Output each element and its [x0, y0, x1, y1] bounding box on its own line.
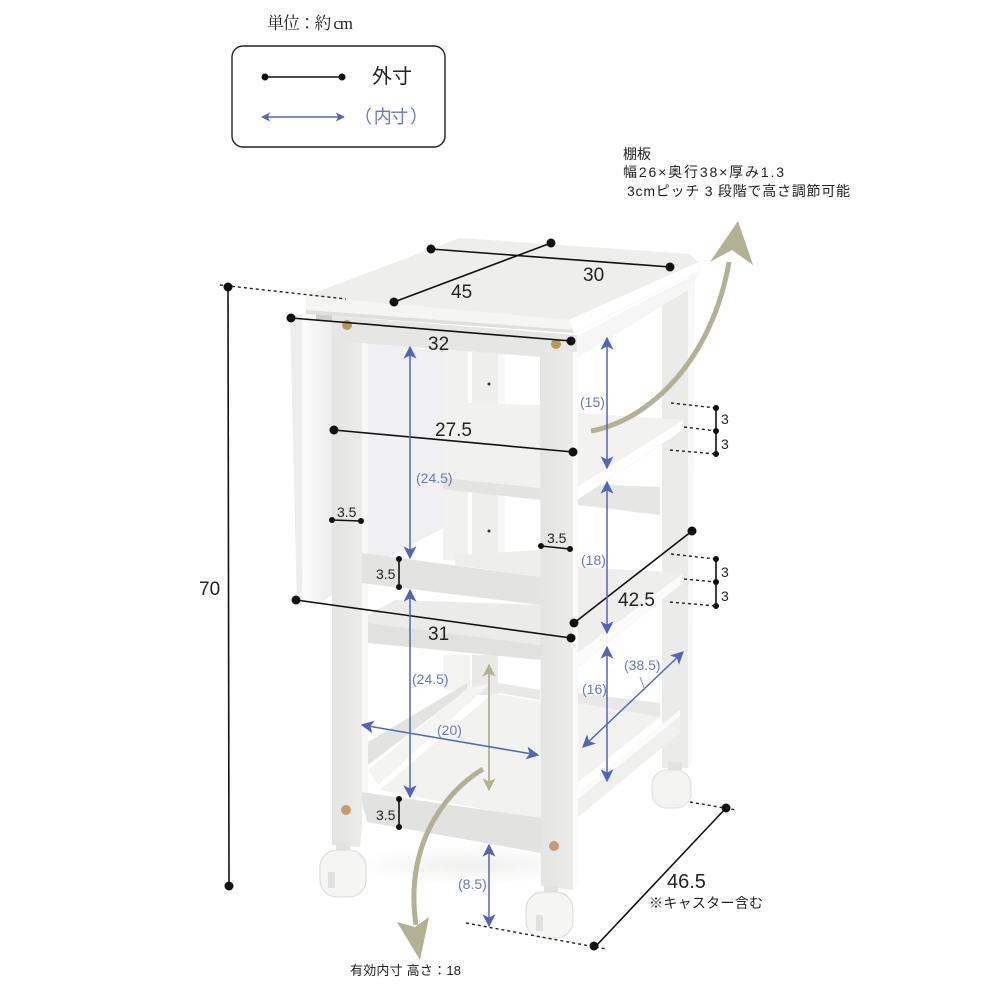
pitch dimensions upper 3 3: 3: [721, 436, 729, 452]
small dimensions 3.5: [329, 504, 573, 830]
shelf note: [623, 146, 850, 199]
front top rail: [332, 316, 577, 358]
dimension: 32: 32: [428, 334, 449, 355]
pitch dimensions upper 3 3: [670, 403, 729, 457]
legend: outer dimension: 外寸: [372, 65, 412, 88]
dimension: 32: [286, 314, 576, 355]
arrow: upper shelf lift: [591, 221, 753, 431]
unit label: 単位：約 cm: [267, 14, 353, 33]
inner dimension: 15: [580, 338, 607, 468]
small dimensions 3.5: 3.5: [337, 504, 357, 520]
inner dimension: 8.5: (8.5): [458, 876, 487, 892]
upper shelf: [368, 403, 683, 500]
inner dimension: 16: [582, 647, 607, 781]
shelf note: 幅26×奥行38×厚み1.3: [623, 164, 784, 180]
effective height note: 有効内寸 高さ：18: [350, 963, 461, 978]
floor shadows: [350, 845, 590, 885]
dimension: 70 total height: 70: [199, 579, 220, 600]
dimension: 42.5: 42.5: [618, 590, 655, 611]
dimension: 42.5: [570, 526, 696, 628]
wagon photo illustration: [290, 238, 700, 938]
inner dimension: 38.5: (38.5): [624, 657, 661, 673]
legend box: [232, 46, 445, 147]
back shelf rails: [578, 484, 660, 515]
legend: outer dimension: [262, 65, 412, 88]
dimension: 31: 31: [428, 624, 449, 645]
small dimensions 3.5: 3.5: [376, 566, 396, 582]
dimension: 46.5 caster: ※キャスター含む: [649, 895, 763, 911]
brass screws: [341, 320, 561, 851]
leg highlight strip: [362, 340, 368, 810]
casters: [320, 762, 691, 938]
small dimensions 3.5: 3.5: [547, 530, 567, 546]
dimension: 45 depth: [390, 238, 556, 306]
back right leg: [662, 285, 688, 768]
legend: inner dimension: （ 内寸 ）: [354, 107, 428, 127]
lower shelf: [368, 550, 683, 667]
dimension: 45 depth: 45: [451, 282, 472, 303]
pitch dimensions lower 3 3: 3: [721, 564, 729, 580]
dimension: 30 width: 30: [583, 265, 604, 286]
inner dimension: 8.5: [458, 845, 489, 926]
front middle rail: [362, 553, 541, 605]
front bottom rail: [360, 792, 541, 853]
back left posts: [441, 350, 505, 695]
inner dimension: 24.5 upper: (24.5): [416, 470, 453, 486]
front left leg: [332, 316, 362, 847]
inner dimension: 20: (20): [437, 722, 462, 738]
dimension: 46.5 caster: 46.5: [667, 871, 706, 893]
inner dimension: 16: (16): [582, 681, 607, 697]
bottom shelf: [368, 683, 680, 820]
inner dimension: 18: (18): [581, 552, 606, 568]
small dimensions 3.5: 3.5: [376, 807, 396, 823]
table top: [306, 238, 700, 358]
shelf note: 棚板: [623, 146, 651, 162]
pitch dimensions lower 3 3: 3: [721, 588, 729, 604]
folding leaf: [290, 312, 443, 608]
inner dimension: 20: [362, 722, 538, 755]
dimension: 70 total height: [199, 282, 346, 890]
arrow: lower shelf vertical khaki: [488, 665, 490, 790]
dimension: 27.5: [330, 420, 578, 456]
dimension: 30 width: [426, 244, 674, 286]
pitch dimensions lower 3 3: [670, 554, 729, 609]
inner dimension: 38.5: [583, 652, 683, 747]
shelf note: 3cmピッチ 3 段階で高さ調節可能: [627, 183, 850, 199]
pitch dimensions upper 3 3: 3: [721, 411, 729, 427]
inner dimension: 24.5 lower: (24.5): [412, 671, 449, 687]
arrow: down curve to effective height: [397, 769, 483, 960]
inner dimension: 15: (15): [580, 394, 605, 410]
dimension: 27.5: 27.5: [435, 420, 472, 441]
dimension: 31: [292, 596, 576, 645]
dimension: 46.5 caster: [466, 802, 763, 950]
front right leg: [540, 350, 573, 890]
